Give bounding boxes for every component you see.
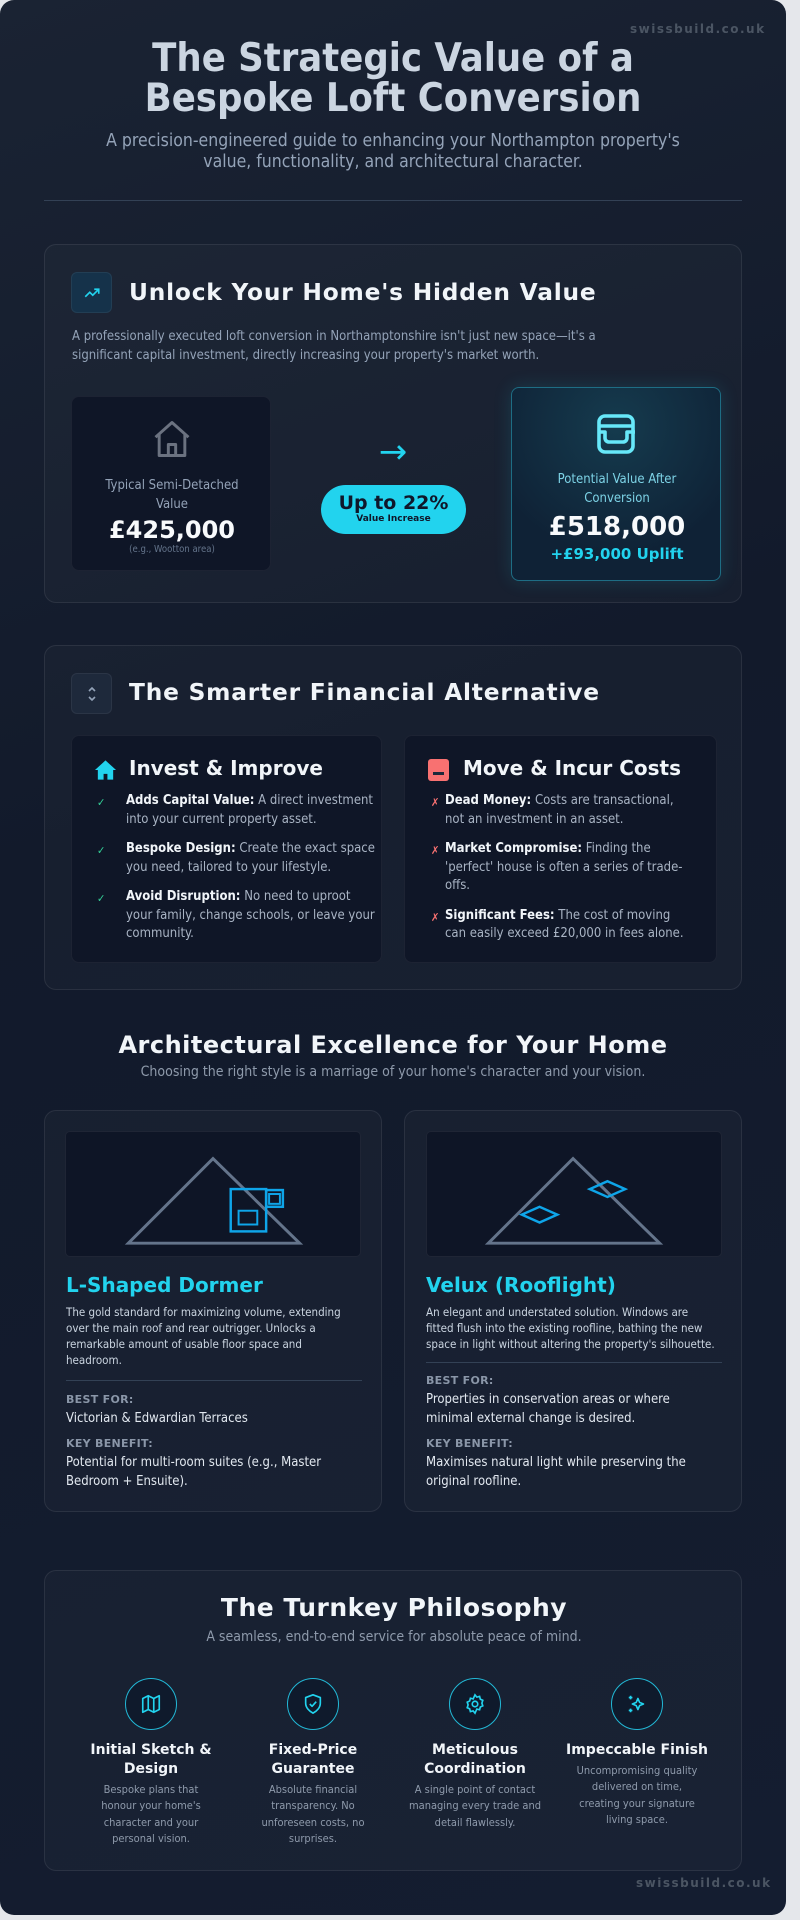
subcard: invest — [71, 735, 382, 963]
box: current value: Value — [156, 497, 188, 512]
bullets: Dead Money: Costs are transactional, — [445, 793, 674, 808]
bullets — [97, 793, 375, 941]
icon: chevrons — [71, 673, 112, 714]
panel: turnkey philosophy: managing every trade and — [409, 1799, 541, 1812]
card: velux: Properties in conservation areas or where — [426, 1392, 670, 1407]
card: L-shaped dormer: The gold standard for maximizing volume, extending — [66, 1305, 341, 1319]
heading: The Smarter Financial Alternative — [129, 679, 600, 706]
subcard: move — [404, 735, 717, 963]
bullets: Significant Fees: The cost of moving — [445, 908, 670, 922]
card: L-shaped dormer: over the main roof and rear outrigger. Unlocks a — [66, 1321, 316, 1335]
icon: sparkle — [611, 1678, 663, 1730]
pill: value increase: Up to 22% — [339, 492, 448, 514]
panel: turnkey philosophy: Coordination — [424, 1761, 526, 1777]
bullets: Avoid Disruption: No need to uproot — [126, 889, 350, 904]
subcard: invest: Invest & Improve — [129, 756, 323, 780]
bullets: 'perfect' house is often a series of trade- — [445, 860, 682, 874]
bullets: offs. — [445, 878, 470, 893]
diagram: dormer — [65, 1131, 361, 1257]
card: velux: KEY BENEFIT: — [426, 1437, 513, 1450]
paragraph: A professionally executed loft conversion in Northamptonshire isn't just new space—it's a — [72, 329, 596, 344]
bullets — [431, 793, 684, 941]
box: after value — [511, 387, 721, 581]
bullets: into your current property asset. — [126, 812, 317, 826]
title: Bespoke Loft Conversion — [145, 75, 641, 121]
bullets: Bespoke Design: Create the exact space — [126, 841, 375, 856]
card: velux: space in light without altering the property's silhouette. — [426, 1337, 715, 1351]
bullets: ✗ — [431, 910, 439, 924]
panel: turnkey philosophy: living space. — [606, 1813, 668, 1826]
card: velux: An elegant and understated solution. Windows are — [426, 1305, 688, 1319]
watermark top: swissbuild.co.uk — [630, 22, 766, 36]
box: after value: Potential Value After — [558, 472, 676, 487]
subtitle: value, functionality, and architectural character. — [203, 152, 583, 172]
panel: turnkey philosophy: transparency. No — [271, 1799, 355, 1812]
card: L-shaped dormer: L-Shaped Dormer — [66, 1273, 263, 1297]
pill: value increase: Value Increase — [356, 514, 431, 524]
bullets: Adds Capital Value: A direct investment — [126, 793, 373, 808]
box: current value — [71, 396, 271, 571]
panel: turnkey philosophy: personal vision. — [112, 1832, 190, 1845]
icon: house — [154, 421, 190, 457]
card: velux: Maximises natural light while preserving the — [426, 1455, 686, 1470]
bullets: ✓ — [97, 796, 105, 809]
panel: turnkey philosophy: character and your — [104, 1816, 198, 1829]
card: velux: minimal external change is desired. — [426, 1411, 635, 1426]
pill: value increase — [321, 485, 466, 534]
panel: turnkey philosophy: Guarantee — [272, 1761, 354, 1777]
box: after value: Conversion — [584, 491, 650, 506]
panel: turnkey philosophy: Meticulous — [432, 1742, 518, 1758]
card: velux: Velux (Rooflight) — [426, 1273, 616, 1297]
box: current value: Typical Semi-Detached — [105, 478, 239, 493]
card: L-shaped dormer: Victorian & Edwardian Terraces — [66, 1411, 248, 1426]
panel: turnkey philosophy: A single point of contact — [415, 1783, 535, 1796]
card: velux: BEST FOR: — [426, 1374, 494, 1387]
arrow: → — [379, 432, 407, 472]
bullets: ✗ — [431, 796, 439, 809]
panel: turnkey philosophy: unforeseen costs, no — [261, 1816, 365, 1829]
subtitle: A precision-engineered guide to enhancing your Northampton property's — [106, 131, 680, 151]
icon: house solid — [95, 760, 116, 780]
card: L-shaped dormer: KEY BENEFIT: — [66, 1437, 153, 1450]
panel: turnkey philosophy: Uncompromising quality — [577, 1764, 697, 1777]
title — [145, 35, 641, 121]
bullets: Market Compromise: Finding the — [445, 841, 651, 856]
subtitle — [106, 131, 680, 172]
paragraph: significant capital investment, directly increasing your property's market worth. — [72, 348, 539, 363]
subcard: move: Move & Incur Costs — [463, 756, 681, 780]
panel: financial alternative — [44, 645, 742, 990]
box: current value: £425,000 — [109, 516, 235, 544]
card: L-shaped dormer: Bedroom + Ensuite). — [66, 1474, 188, 1489]
section heading: architectural: Architectural Excellence for Your Home — [118, 1031, 668, 1059]
bullets: can easily exceed £20,000 in fees alone. — [445, 926, 684, 941]
bullets: ✓ — [97, 844, 105, 857]
icon: minus box — [428, 759, 449, 781]
icon: window — [597, 414, 635, 454]
icon: trend — [71, 272, 112, 313]
watermark bottom: swissbuild.co.uk — [636, 1876, 772, 1890]
panel: turnkey philosophy: Fixed-Price — [269, 1742, 357, 1758]
card: velux — [404, 1110, 742, 1512]
box: current value: (e.g., Wootton area) — [129, 544, 215, 555]
card: L-shaped dormer: headroom. — [66, 1353, 122, 1367]
step 4 — [566, 1678, 708, 1826]
panel: turnkey philosophy: Bespoke plans that — [104, 1783, 198, 1796]
card: L-shaped dormer: Potential for multi-room suites (e.g., Master — [66, 1455, 321, 1470]
step 2 — [261, 1678, 365, 1845]
panel: turnkey philosophy: detail flawlessly. — [435, 1816, 515, 1829]
box: after value: +£93,000 Uplift — [550, 545, 684, 563]
heading: Unlock Your Home's Hidden Value — [129, 279, 596, 306]
panel: turnkey philosophy: A seamless, end-to-end service for absolute peace of mind. — [206, 1629, 582, 1645]
panel: turnkey philosophy: Design — [124, 1761, 178, 1777]
icon: gear — [449, 1678, 501, 1730]
bullets: not an investment in an asset. — [445, 812, 623, 826]
bullets: you need, tailored to your lifestyle. — [126, 860, 331, 874]
bullets: ✗ — [431, 844, 439, 857]
section subtitle: Choosing the right style is a marriage of your home's character and your vision. — [141, 1064, 645, 1080]
card: L-shaped dormer: remarkable amount of usable floor space and — [66, 1337, 302, 1351]
panel: unlock value — [44, 244, 742, 603]
icon: shield — [287, 1678, 339, 1730]
step 1 — [90, 1678, 212, 1845]
box: after value: £518,000 — [549, 512, 685, 542]
panel: turnkey philosophy: honour your home's — [101, 1799, 201, 1812]
bullets: ✓ — [97, 892, 105, 905]
diagram: velux — [426, 1131, 722, 1257]
panel: turnkey philosophy: Impeccable Finish — [566, 1742, 708, 1758]
bullets: your family, change schools, or leave your — [126, 908, 375, 922]
card: velux: fitted flush into the existing roofline, bathing the new — [426, 1321, 702, 1335]
icon: map — [125, 1678, 177, 1730]
title: The Strategic Value of a — [152, 35, 634, 81]
card: velux: original roofline. — [426, 1474, 521, 1489]
panel: turnkey philosophy — [44, 1570, 742, 1871]
bullets: community. — [126, 926, 194, 941]
panel: turnkey philosophy: surprises. — [289, 1832, 337, 1845]
card: L-shaped dormer: BEST FOR: — [66, 1393, 134, 1406]
panel: turnkey philosophy: Absolute financial — [269, 1783, 357, 1796]
panel: turnkey philosophy: delivered on time, — [592, 1780, 682, 1793]
paragraph — [72, 329, 596, 363]
panel: turnkey philosophy: creating your signature — [579, 1797, 695, 1810]
panel: turnkey philosophy: Initial Sketch & — [90, 1742, 212, 1758]
card: L-shaped dormer — [44, 1110, 382, 1512]
heading: The Turnkey Philosophy — [221, 1593, 567, 1622]
step 3 — [409, 1678, 541, 1829]
